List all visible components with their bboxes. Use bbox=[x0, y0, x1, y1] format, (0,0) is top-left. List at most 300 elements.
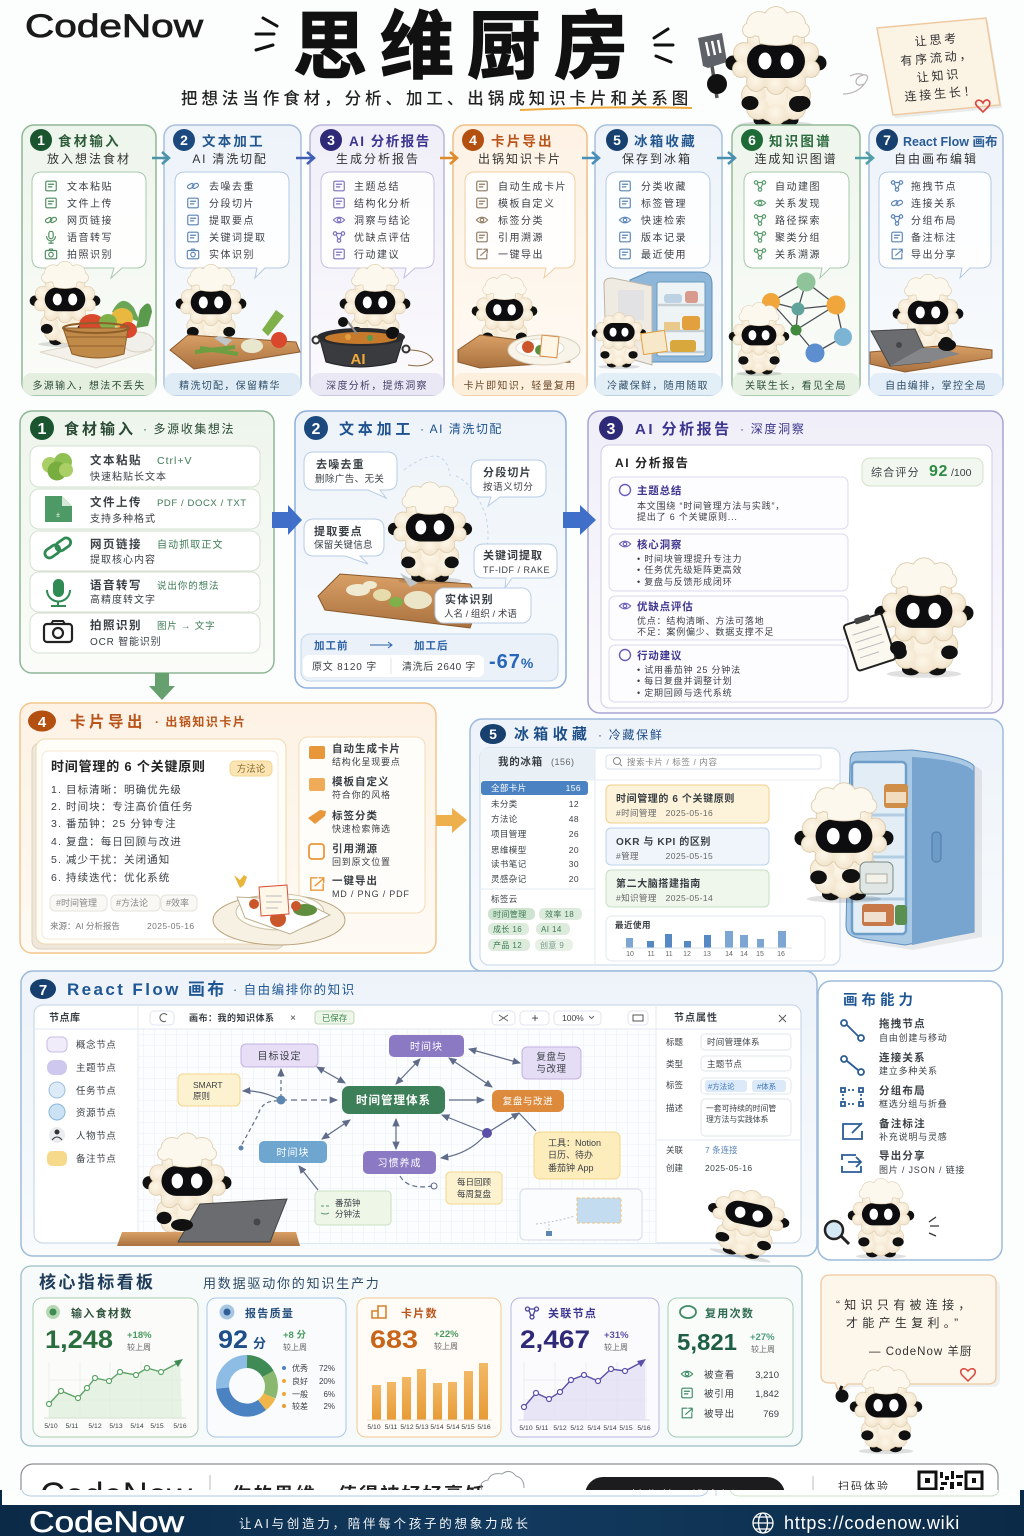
knowledge graph with mascot bbox=[729, 272, 852, 376]
property panel: 关联 bbox=[666, 1145, 684, 1155]
nodes: 目标设定 bbox=[258, 1050, 302, 1062]
callout: 分段切片: 按语义切分 bbox=[483, 481, 534, 493]
callout: 去噪去重: 去噪去重 bbox=[316, 457, 365, 471]
tag cloud: AI 14 bbox=[541, 925, 562, 934]
panel: step 1 食材输入: 多源输入，想法不丢失 bbox=[32, 379, 146, 392]
knowledge card: 5. 减少干扰：关闭通知 bbox=[51, 853, 170, 866]
callout: 去噪去重 bbox=[304, 452, 397, 498]
property panel: 创建 bbox=[666, 1163, 684, 1173]
section: 核心洞察: • 复盘与反馈形成闭环 bbox=[637, 576, 732, 587]
panel: step 4 卡片导出: 模板自定义 bbox=[498, 197, 556, 210]
card: 第二大脑: #知识管理 2025-05-14 bbox=[616, 893, 713, 903]
panel: step 5 冰箱收藏: 最近使用 bbox=[641, 248, 687, 261]
knowledge card: 6. 持续迭代：优化系统 bbox=[51, 871, 170, 884]
row: 文本粘贴: Ctrl+V bbox=[157, 455, 192, 467]
panel: step 4 卡片导出: 自动生成卡片 bbox=[498, 180, 567, 193]
nodes: 与改理 bbox=[536, 1063, 567, 1075]
tag cloud: 标签云 bbox=[491, 894, 518, 904]
line chart: 5/12 bbox=[553, 1425, 567, 1432]
line chart: 5/15 bbox=[150, 1423, 164, 1430]
before after stats: 原文 8120 字 bbox=[312, 660, 377, 673]
panel: detail 2 文本加工: 文本加工 bbox=[339, 420, 414, 438]
nodes: 番茄钟 App bbox=[548, 1162, 594, 1173]
features list bbox=[299, 737, 425, 913]
panel: canvas capabilities: 分组布局 bbox=[879, 1084, 926, 1097]
panel: step 1 食材输入 bbox=[22, 125, 156, 395]
panel: step 7 React Flow 画布: React Flow 画布 bbox=[903, 134, 997, 149]
row: 语音转写: 语音转写 bbox=[90, 578, 142, 592]
toolbar: × bbox=[290, 1013, 296, 1024]
mascot with laptop bbox=[117, 1133, 300, 1246]
features list: 一键导出 bbox=[332, 874, 378, 887]
panel: detail 7 React Flow 画布: · 自由编排你的知识 bbox=[233, 982, 356, 997]
metric card: 卡片数: 卡片数 bbox=[401, 1306, 438, 1320]
row: 文件上传 bbox=[30, 489, 260, 529]
panel: step 1 食材输入: 网页链接 bbox=[67, 214, 113, 227]
category list: 26 bbox=[569, 829, 579, 839]
knowledge card: 2. 时间块：专注高价值任务 bbox=[51, 800, 194, 813]
footer card partially covered bbox=[21, 1464, 998, 1534]
panel: step 4 卡片导出: 一键导出 bbox=[498, 248, 544, 261]
panel: detail 3 AI 分析报告: AI 分析报告 bbox=[615, 455, 690, 470]
line chart: 5/16 bbox=[637, 1425, 651, 1432]
metric card: 复用次数: 较上周 bbox=[751, 1344, 775, 1354]
panel: canvas capabilities: 补充说明与灵感 bbox=[879, 1131, 948, 1142]
recently used bars: 最近使用 bbox=[615, 920, 651, 930]
section: 行动建议: • 试用番茄钟 25 分钟法 bbox=[637, 664, 741, 675]
panel: step 6 知识图谱: 连成知识图谱 bbox=[755, 151, 837, 166]
section: 核心洞察: • 任务优先级矩阵更高效 bbox=[637, 564, 742, 575]
metric card: 输入食材数: 1,248 bbox=[45, 1326, 113, 1354]
panel: step 7 React Flow 画布: 拖拽节点 bbox=[911, 180, 957, 193]
panel: step 7 React Flow 画布: 分组布局 bbox=[911, 214, 957, 227]
panel: step 7 React Flow 画布: 7 bbox=[883, 132, 891, 148]
tag cloud: 创意 9 bbox=[540, 940, 564, 950]
metric card: 报告质量: +8 分 bbox=[283, 1329, 306, 1341]
knowledge card: #效率 bbox=[166, 897, 189, 908]
mascot with plate bbox=[458, 275, 580, 368]
panel: step 6 知识图谱: 路径探索 bbox=[775, 214, 821, 227]
card: OKR bbox=[606, 828, 769, 865]
line chart: 5/14 bbox=[603, 1425, 617, 1432]
panel: detail 1 食材输入: 食材输入 bbox=[64, 420, 136, 438]
fridge app window: 我的冰箱 bbox=[498, 755, 543, 768]
knowledge card: 来源：AI 分析报告 bbox=[50, 921, 120, 931]
category list: 48 bbox=[569, 814, 579, 824]
callout: 实体识别: 人名 / 组织 / 术语 bbox=[444, 608, 517, 620]
metric card: 报告质量 bbox=[207, 1298, 346, 1437]
card: 时间管理 bbox=[606, 785, 769, 823]
sticky note: 让知识 bbox=[916, 67, 962, 85]
arrow: orange right bbox=[436, 808, 467, 833]
arrow: green down bbox=[149, 673, 175, 700]
knowledge card bbox=[32, 739, 286, 949]
features list: 模板自定义 bbox=[332, 775, 390, 788]
panel: canvas capabilities: 拖拽节点 bbox=[879, 1017, 926, 1030]
panel: step 7 React Flow 画布 bbox=[869, 125, 1003, 395]
knowledge card: #时间管理 bbox=[56, 897, 97, 908]
panel: canvas capabilities bbox=[818, 981, 1002, 1260]
panel: step 1 食材输入: 放入想法食材 bbox=[47, 151, 131, 166]
section: 优缺点评估: 优缺点评估 bbox=[637, 600, 694, 613]
arrow: blue right 2 bbox=[563, 505, 596, 535]
property panel: 7 条连接 bbox=[705, 1145, 738, 1155]
callout: 关键词提取: 关键词提取 bbox=[483, 548, 543, 562]
donut legend: 较差 bbox=[292, 1401, 308, 1411]
panel: step 7 React Flow 画布: 自由编排，掌控全局 bbox=[885, 379, 987, 392]
tag cloud: 效率 18 bbox=[545, 909, 574, 919]
metric card: 报告质量: 报告质量 bbox=[245, 1306, 294, 1320]
panel: core metrics dashboard: 核心指标看板 bbox=[39, 1272, 155, 1292]
panel: step 1 食材输入: 文本粘贴 bbox=[67, 180, 113, 193]
features list: MD / PNG / PDF bbox=[332, 889, 410, 899]
dashed decoration bbox=[404, 456, 488, 550]
panel: step 5 冰箱收藏: 版本记录 bbox=[641, 231, 687, 244]
panel: step 2 文本加工: 去噪去重 bbox=[209, 180, 255, 193]
metric card: 卡片数: 5/10 bbox=[367, 1424, 381, 1431]
panel: step 1 食材输入: 食材输入 bbox=[58, 133, 121, 149]
section: 行动建议: • 每日复盘并调整计划 bbox=[637, 675, 732, 686]
panel: step 7 React Flow 画布: 备注标注 bbox=[911, 231, 957, 244]
panel: canvas capabilities: 框选分组与折叠 bbox=[879, 1098, 948, 1109]
donut chart bbox=[223, 1362, 271, 1410]
panel: step 3 AI 分析报告 bbox=[310, 125, 444, 395]
metric card: 报告质量: 92 bbox=[218, 1326, 248, 1354]
features list: 结构化呈现要点 bbox=[332, 756, 401, 767]
tag cloud: 时间管理 bbox=[493, 909, 527, 919]
features list: 快速检索筛选 bbox=[332, 823, 391, 834]
knowledge card: 时间管理的 6 个关键原则 bbox=[51, 759, 206, 774]
donut legend: 优秀 bbox=[292, 1363, 308, 1373]
panel: step 6 知识图谱: 6 bbox=[748, 132, 756, 148]
section: 主题总结: 主题总结 bbox=[637, 484, 682, 497]
search box bbox=[606, 755, 821, 769]
metric card: 关联节点: 较上周 bbox=[604, 1342, 628, 1352]
sticky note: 连接生长！ bbox=[904, 83, 979, 104]
callout: 分段切片: 分段切片 bbox=[483, 465, 532, 479]
toolbar: 已保存 bbox=[322, 1013, 348, 1023]
panel: step 3 AI 分析报告: 生成分析报告 bbox=[336, 151, 420, 166]
sticky note: 有序流动， bbox=[900, 47, 975, 68]
metric card: 关联节点: +31% bbox=[604, 1330, 629, 1341]
tag cloud bbox=[488, 894, 582, 951]
metric card: 复用次数: 被查看 bbox=[704, 1369, 735, 1381]
panel: step 2 文本加工: 提取要点 bbox=[209, 215, 255, 227]
callout: 去噪去重: 删除广告、无关 bbox=[315, 473, 384, 485]
arrow: blue right bbox=[272, 505, 302, 535]
line chart: 5/12 bbox=[570, 1425, 584, 1432]
line chart: 5/11 bbox=[536, 1425, 549, 1432]
panel: step 2 文本加工: 分段切片 bbox=[209, 197, 255, 210]
panel: step 6 知识图谱: 聚类分组 bbox=[775, 231, 821, 244]
property panel: 2025-05-16 bbox=[705, 1163, 752, 1173]
knowledge card: 4. 复盘：每日回顾与改进 bbox=[51, 835, 182, 848]
line chart: 5/13 bbox=[109, 1423, 123, 1430]
metric card: 输入食材数: 较上周 bbox=[127, 1342, 151, 1352]
recently used bars bbox=[606, 916, 825, 961]
QR code bbox=[919, 1471, 982, 1491]
panel: detail 4 卡片导出: 卡片导出 bbox=[70, 713, 146, 731]
quote bubble: 才能产生复利。” bbox=[846, 1316, 962, 1330]
recently used bars: 16 bbox=[777, 951, 785, 958]
line chart bbox=[44, 1359, 187, 1430]
panel: step 4 卡片导出: 出锅知识卡片 bbox=[478, 151, 562, 166]
panel: step 3 AI 分析报告: 结构化分析 bbox=[354, 197, 412, 210]
panel: canvas capabilities: 图片 / JSON / 链接 bbox=[879, 1164, 965, 1175]
nodes: 复盘与 bbox=[536, 1051, 567, 1063]
mascot with laptop bbox=[870, 275, 992, 372]
recently used bars: 14 bbox=[740, 951, 748, 958]
panel: step 2 文本加工 bbox=[164, 125, 301, 395]
panel: step 4 卡片导出: 4 bbox=[469, 132, 477, 148]
mascot with basket bbox=[30, 262, 154, 368]
property panel: 一套可持续的时间管 bbox=[706, 1103, 776, 1113]
row: 文本粘贴: 文本粘贴 bbox=[90, 453, 142, 467]
section: 优缺点评估: 优点：结构清晰、方法可落地 bbox=[637, 615, 764, 626]
nodes: 工具：Notion bbox=[548, 1138, 601, 1148]
property panel: 时间管理体系 bbox=[707, 1037, 760, 1047]
before after stats: -67% bbox=[489, 651, 534, 673]
toolbar bbox=[150, 1011, 648, 1025]
row: 网页链接 bbox=[30, 531, 260, 571]
row: 文件上传: PDF / DOCX / TXT bbox=[157, 498, 247, 509]
knowledge card: 3. 番茄钟：25 分钟专注 bbox=[51, 817, 177, 830]
nodes: 复盘与改进 bbox=[503, 1096, 553, 1108]
score badge: /100 bbox=[951, 467, 972, 479]
panel: detail 1 食材输入 bbox=[20, 411, 274, 673]
donut legend bbox=[282, 1363, 335, 1411]
metric card: 关联节点 bbox=[511, 1298, 659, 1437]
row: 文本粘贴 bbox=[30, 446, 260, 487]
footer card partially covered: 你的思维，值得被好好烹饪 bbox=[232, 1483, 486, 1506]
row: 文件上传: 文件上传 bbox=[90, 495, 142, 509]
toolbar: 画布：我的知识体系 bbox=[189, 1012, 275, 1023]
line chart: 5/10 bbox=[519, 1425, 533, 1432]
toolbar: + bbox=[531, 1011, 539, 1025]
panel: detail 5 冰箱收藏: 冰箱收藏 bbox=[514, 725, 591, 743]
donut legend: 20% bbox=[319, 1377, 335, 1386]
panel: detail 3 AI 分析报告 bbox=[588, 411, 1003, 713]
panel: detail 7 React Flow 画布: React Flow 画布 bbox=[67, 980, 227, 999]
footer bar: 让AI与创造力，陪伴每个孩子的想象力成长 bbox=[239, 1516, 531, 1531]
panel: step 6 知识图谱 bbox=[729, 125, 860, 395]
sidebar node library: 任务节点 bbox=[76, 1085, 116, 1097]
nodes: 时间管理体系 bbox=[356, 1093, 431, 1107]
arrow 2 to 3 bbox=[296, 152, 314, 164]
mascot with AI pot bbox=[312, 265, 433, 368]
subtitle underline bbox=[520, 107, 692, 110]
arrow 1 to 2 bbox=[152, 152, 169, 164]
panel: core metrics dashboard bbox=[21, 1266, 802, 1446]
panel: core metrics dashboard: 用数据驱动你的知识生产力 bbox=[203, 1276, 381, 1291]
search box: 搜索卡片 / 标签 / 内容 bbox=[627, 757, 718, 767]
panel: step 7 React Flow 画布: 连接关系 bbox=[911, 197, 957, 210]
metric card: 输入食材数: +18% bbox=[127, 1330, 152, 1341]
panel: detail 1 食材输入: 1 bbox=[38, 421, 47, 438]
metric card: 报告质量: 较上周 bbox=[283, 1342, 307, 1352]
metric card: 输入食材数 bbox=[33, 1298, 198, 1437]
panel: step 4 卡片导出: 标签分类 bbox=[498, 214, 544, 227]
before after stats: 加工后 bbox=[414, 639, 448, 652]
nodes: 时间块 bbox=[410, 1040, 443, 1053]
panel: step 7 React Flow 画布: 自由画布编辑 bbox=[894, 151, 978, 166]
row: 语音转写 bbox=[30, 572, 260, 612]
panel: step 3 AI 分析报告: 优缺点评估 bbox=[354, 231, 412, 244]
metric card: 卡片数: 5/15 bbox=[461, 1424, 475, 1431]
flow edges bbox=[238, 1049, 536, 1190]
category list: 思维模型 bbox=[491, 845, 527, 855]
section: 行动建议: • 定期回顾与迭代系统 bbox=[637, 687, 732, 698]
panel: step 1 食材输入: 语音转写 bbox=[67, 231, 113, 244]
quote bubble: — CodeNow 羊厨 bbox=[869, 1344, 972, 1358]
knowledge card: #方法论 bbox=[116, 897, 148, 908]
line chart: 5/10 bbox=[44, 1423, 58, 1430]
section: 核心洞察: 核心洞察 bbox=[637, 538, 682, 551]
panel: step 4 卡片导出: 卡片即知识，轻量复用 bbox=[464, 379, 576, 392]
before after stats: 清洗后 2640 字 bbox=[402, 660, 476, 673]
callout: 关键词提取: TF-IDF / RAKE bbox=[483, 565, 550, 575]
category list: 读书笔记 bbox=[491, 859, 527, 869]
line chart: 5/16 bbox=[173, 1423, 187, 1430]
quote bubble: “知识只有被连接， bbox=[836, 1297, 975, 1312]
panel: detail 5 冰箱收藏: · 冷藏保鲜 bbox=[598, 728, 664, 742]
panel: step 2 文本加工: 实体识别 bbox=[209, 248, 255, 261]
sidebar node library: 人物节点 bbox=[76, 1130, 116, 1142]
plate with card bbox=[213, 875, 345, 945]
recently used bars: 10 bbox=[626, 951, 634, 958]
donut legend: 2% bbox=[323, 1402, 335, 1411]
nodes bbox=[178, 1035, 620, 1225]
section: 行动建议 bbox=[609, 645, 848, 702]
section: 主题总结: 提出了 6 个关键原则... bbox=[637, 511, 738, 522]
score badge: 92 bbox=[929, 463, 948, 480]
panel: detail 5 冰箱收藏: 5 bbox=[489, 726, 497, 742]
nodes: 番茄钟 bbox=[335, 1198, 361, 1208]
features list: 引用溯源 bbox=[332, 842, 378, 855]
features list: 回到原文位置 bbox=[332, 856, 391, 867]
category list: 20 bbox=[569, 874, 579, 884]
property panel: 标签 bbox=[666, 1080, 684, 1090]
callout: 实体识别: 实体识别 bbox=[445, 592, 494, 606]
line chart: 5/15 bbox=[619, 1425, 633, 1432]
recently used bars: 14 bbox=[725, 951, 733, 958]
quote bubble bbox=[821, 1275, 1000, 1395]
nodes: 日历、待办 bbox=[548, 1149, 593, 1160]
section: 行动建议: 行动建议 bbox=[637, 649, 682, 662]
category list: 156 bbox=[566, 783, 581, 793]
metric card: 复用次数: 被引用 bbox=[704, 1388, 735, 1400]
row: 文件上传: 支持多种格式 bbox=[90, 512, 156, 525]
panel: step 3 AI 分析报告: 主题总结 bbox=[354, 180, 400, 193]
panel: detail 4 卡片导出: · 出锅知识卡片 bbox=[155, 714, 246, 729]
panel: step 5 冰箱收藏: 保存到冰箱 bbox=[622, 151, 692, 166]
mascot with magnifier bbox=[825, 1179, 939, 1259]
metric card: 卡片数: 5/12 bbox=[400, 1424, 414, 1431]
sidebar node library: 概念节点 bbox=[76, 1039, 116, 1051]
before after stats bbox=[301, 634, 558, 681]
line chart: 5/11 bbox=[66, 1423, 79, 1430]
recently used bars: 11 bbox=[647, 951, 655, 958]
panel: step 2 文本加工: 文本加工 bbox=[202, 133, 265, 149]
property panel: 类型 bbox=[666, 1059, 684, 1069]
row: 语音转写: 说出你的想法 bbox=[157, 580, 219, 592]
panel: step 2 文本加工: 关键词提取 bbox=[209, 231, 266, 244]
line chart bbox=[518, 1359, 651, 1432]
arrow 4 to 5 bbox=[582, 152, 599, 164]
category list: 未分类 bbox=[491, 799, 518, 809]
line chart: 5/14 bbox=[130, 1423, 144, 1430]
metric card: 复用次数: 复用次数 bbox=[705, 1306, 754, 1320]
fridge app window: (156) bbox=[551, 757, 575, 767]
before after stats: 加工前 bbox=[314, 639, 348, 652]
sticky note: 让思考 bbox=[914, 31, 959, 49]
footer card partially covered: 扫码体验 bbox=[838, 1479, 890, 1493]
property panel: 描述 bbox=[666, 1103, 684, 1113]
minimap bbox=[520, 1189, 642, 1240]
panel: canvas capabilities: 导出分享 bbox=[879, 1149, 926, 1162]
metric card: 复用次数: 769 bbox=[763, 1409, 779, 1420]
big fridge with mascot bbox=[795, 750, 982, 950]
section: 优缺点评估: 不足：案例偏少、数据支撑不足 bbox=[637, 626, 774, 637]
category list: 12 bbox=[569, 799, 579, 809]
row: 文件上传: ± bbox=[56, 512, 60, 519]
metric card: 卡片数: +22% bbox=[434, 1329, 459, 1340]
fridge app window bbox=[480, 748, 840, 965]
features list: 符合你的风格 bbox=[332, 789, 391, 800]
row: 拍照识别: 拍照识别 bbox=[90, 618, 142, 632]
recently used bars: 12 bbox=[683, 951, 691, 958]
category list: 灵感杂记 bbox=[491, 874, 527, 884]
score badge bbox=[862, 458, 983, 486]
card: 第二大脑 bbox=[606, 870, 769, 907]
recently used bars: 11 bbox=[665, 951, 673, 958]
card: OKR: #管理 2025-05-15 bbox=[616, 851, 713, 861]
panel: step 5 冰箱收藏 bbox=[592, 125, 722, 395]
tag cloud: 成长 16 bbox=[493, 924, 522, 934]
category list: 方法论 bbox=[491, 814, 518, 824]
panel: detail 2 文本加工: 2 bbox=[312, 421, 321, 438]
panel: step 6 知识图谱: 知识图谱 bbox=[769, 133, 832, 149]
metric card: 卡片数 bbox=[357, 1298, 501, 1437]
line chart: 5/12 bbox=[88, 1423, 102, 1430]
callout: 提取要点: 保留关键信息 bbox=[314, 539, 373, 551]
property panel: 标题 bbox=[666, 1037, 684, 1047]
callout: 实体识别 bbox=[435, 588, 531, 623]
row: 网页链接: 提取核心内容 bbox=[90, 553, 156, 566]
panel: step 3 AI 分析报告: 深度分析，提炼洞察 bbox=[326, 379, 428, 392]
property panel bbox=[656, 1011, 800, 1173]
panel: detail 1 食材输入: · 多源收集想法 bbox=[143, 421, 235, 436]
toolbar: 100% bbox=[562, 1013, 584, 1023]
panel: step 2 文本加工: 2 bbox=[180, 132, 188, 148]
knowledge card: 2025-05-16 bbox=[147, 921, 194, 931]
panel: step 5 冰箱收藏: 快速检索 bbox=[641, 214, 687, 227]
callout: 分段切片 bbox=[471, 460, 546, 506]
panel: step 1 食材输入: 1 bbox=[37, 132, 45, 148]
sidebar node library: 主题节点 bbox=[76, 1062, 116, 1074]
knowledge card: 方法论 bbox=[237, 763, 266, 775]
section: 核心洞察: • 时间块管理提升专注力 bbox=[637, 553, 742, 564]
metric card: 输入食材数: 输入食材数 bbox=[71, 1306, 132, 1320]
panel: detail 3 AI 分析报告: · 深度洞察 bbox=[740, 421, 806, 436]
metric card: 卡片数: 5/14 bbox=[446, 1424, 460, 1431]
row: 文本粘贴: 快速粘贴长文本 bbox=[90, 470, 167, 483]
panel: canvas capabilities: 连接关系 bbox=[879, 1051, 926, 1064]
mascot with AI pot: AI bbox=[350, 351, 366, 368]
metric card: 卡片数: 5/13 bbox=[415, 1424, 429, 1431]
panel: step 4 卡片导出: 卡片导出 bbox=[491, 133, 554, 149]
panel: canvas capabilities: 自由创建与移动 bbox=[879, 1032, 948, 1043]
